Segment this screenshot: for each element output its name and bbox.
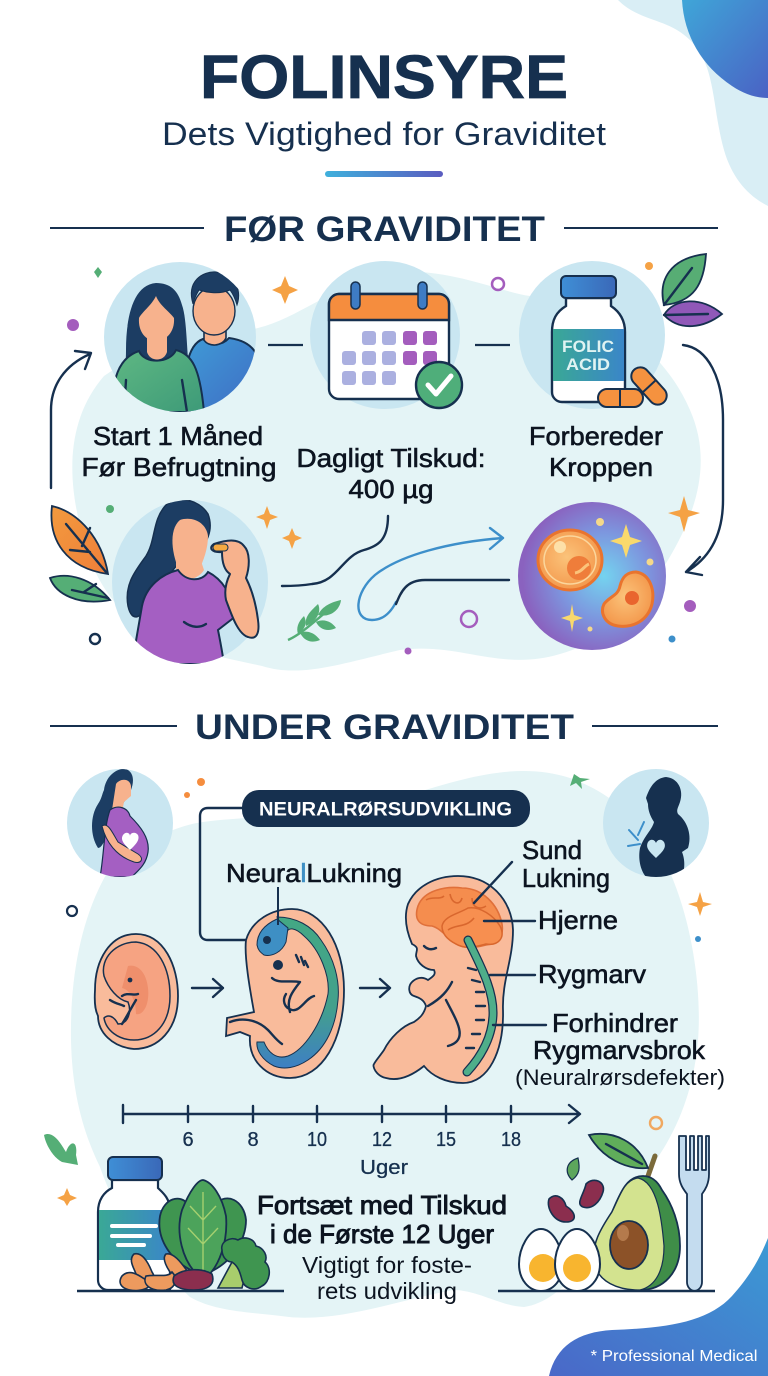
text: forbereder kroppen	[529, 421, 663, 482]
icon: capsules	[598, 364, 670, 408]
text: forbereder kroppen: Forbereder	[529, 421, 663, 451]
icon: foods right	[498, 1134, 715, 1291]
arrow: embryo 2 to 3	[360, 979, 390, 997]
label: neural lukning: NeuralLukning	[226, 858, 402, 888]
text: fortsæt med tilskud	[257, 1190, 507, 1249]
labels: embryo 3: Forhindrer	[552, 1008, 678, 1038]
subtitle: Dets Vigtighed for Graviditet	[162, 116, 606, 152]
text: forbereder kroppen: Kroppen	[549, 452, 653, 482]
arrow: embryo 1 to 2	[192, 979, 223, 997]
icon: embryo 3	[374, 876, 513, 1083]
icon: silhouette right	[603, 769, 709, 877]
icon: small leaf	[567, 1158, 579, 1180]
text: start 1 måned: Før Befrugtning	[82, 452, 276, 482]
bottom-right corner blob	[549, 1238, 768, 1376]
icon: sprig	[288, 600, 341, 642]
labels: embryo 3: Sund	[522, 835, 582, 865]
text: vigtigt for fosterets udvikling: rets udvikling	[317, 1278, 457, 1304]
connector: woman to cells	[396, 580, 509, 604]
icon: leaves top right	[663, 254, 722, 326]
arrow: blue curve to cells	[358, 528, 503, 620]
title: FOLINSYRE	[200, 43, 568, 111]
timeline: 8	[247, 1129, 259, 1151]
text: vigtigt for fosterets udvikling	[302, 1252, 472, 1304]
callout pill: neuralrørsudvikling: NEURALRØRSUDVIKLING	[259, 798, 512, 820]
icon: nuts and bean	[120, 1254, 213, 1291]
icon: leaves left	[50, 506, 110, 602]
text: start 1 måned	[82, 421, 276, 482]
timeline: Uger	[360, 1157, 408, 1179]
section heading: under graviditet: UNDER GRAVIDITET	[195, 708, 574, 747]
labels: embryo 3	[515, 835, 725, 1090]
panel: før graviditet	[50, 254, 723, 671]
icon: eggs	[519, 1229, 600, 1291]
text: dagligt tilskud: Dagligt Tilskud:	[296, 443, 486, 473]
icon: cells sphere	[518, 502, 666, 650]
labels: embryo 3: (Neuralrørsdefekter)	[515, 1065, 725, 1090]
icon: supplement bottle with greens	[77, 1157, 284, 1291]
icon: calendar	[310, 261, 462, 409]
icon: folic acid bottle: ACID	[566, 356, 610, 374]
icon: spinach	[159, 1180, 246, 1290]
icon: folic acid bottle: FOLIC	[562, 338, 614, 356]
labels: embryo 3: Lukning	[522, 863, 610, 893]
timeline: 10	[307, 1129, 327, 1151]
icon: pregnant woman left	[67, 769, 173, 877]
text: dagligt tilskud	[296, 443, 486, 504]
icon: broccoli	[218, 1238, 269, 1289]
arrow: bottle to cells	[683, 345, 723, 575]
text: start 1 måned: Start 1 Måned	[93, 421, 263, 451]
connector: couple to calendar	[268, 344, 303, 346]
decorative dots and sparkles: under graviditet	[44, 774, 712, 1206]
text: vigtigt for fosterets udvikling: Vigtigt for foste-	[302, 1252, 472, 1278]
text: fortsæt med tilskud: Fortsæt med Tilskud	[257, 1190, 507, 1220]
timeline: 15	[436, 1129, 456, 1151]
icon: couple	[104, 262, 258, 412]
timeline	[123, 1105, 580, 1179]
decorative dots and sparkles: før graviditet	[67, 262, 700, 654]
icon: kidney beans	[548, 1180, 603, 1222]
timeline: 6	[182, 1129, 194, 1151]
connector: dosage to woman	[282, 516, 388, 586]
connector: pill to neural tube	[200, 808, 267, 940]
section heading: før graviditet: FØR GRAVIDITET	[224, 210, 545, 249]
icon: embryo 1	[95, 934, 178, 1049]
text: fortsæt med tilskud: i de Første 12 Uger	[270, 1219, 494, 1249]
leader: neural lukning	[277, 887, 279, 925]
decorative top-right blob	[618, 0, 768, 206]
panel: under graviditet	[44, 769, 725, 1318]
callout pill: neuralrørsudvikling	[242, 790, 530, 827]
connector: calendar to bottle	[475, 344, 510, 346]
title accent bar	[325, 171, 443, 177]
icon: embryo 2	[226, 909, 344, 1078]
footer note: * Professional Medical	[590, 1348, 758, 1365]
timeline: 12	[372, 1129, 392, 1151]
leaders: embryo 3 labels	[474, 862, 546, 1025]
arrow: loop back to couple	[51, 351, 91, 488]
labels: embryo 3: Rygmarv	[538, 959, 646, 989]
icon: fork	[679, 1136, 709, 1291]
icon: folic acid bottle	[519, 261, 670, 409]
labels: embryo 3: Hjerne	[538, 905, 618, 935]
icon: woman taking tablet	[112, 500, 268, 664]
icon: tablet	[213, 544, 228, 551]
labels: embryo 3: Rygmarvsbrok	[533, 1035, 706, 1065]
icon: avocado	[589, 1134, 680, 1290]
text: dagligt tilskud: 400 µg	[348, 474, 434, 504]
timeline: 18	[501, 1129, 521, 1151]
